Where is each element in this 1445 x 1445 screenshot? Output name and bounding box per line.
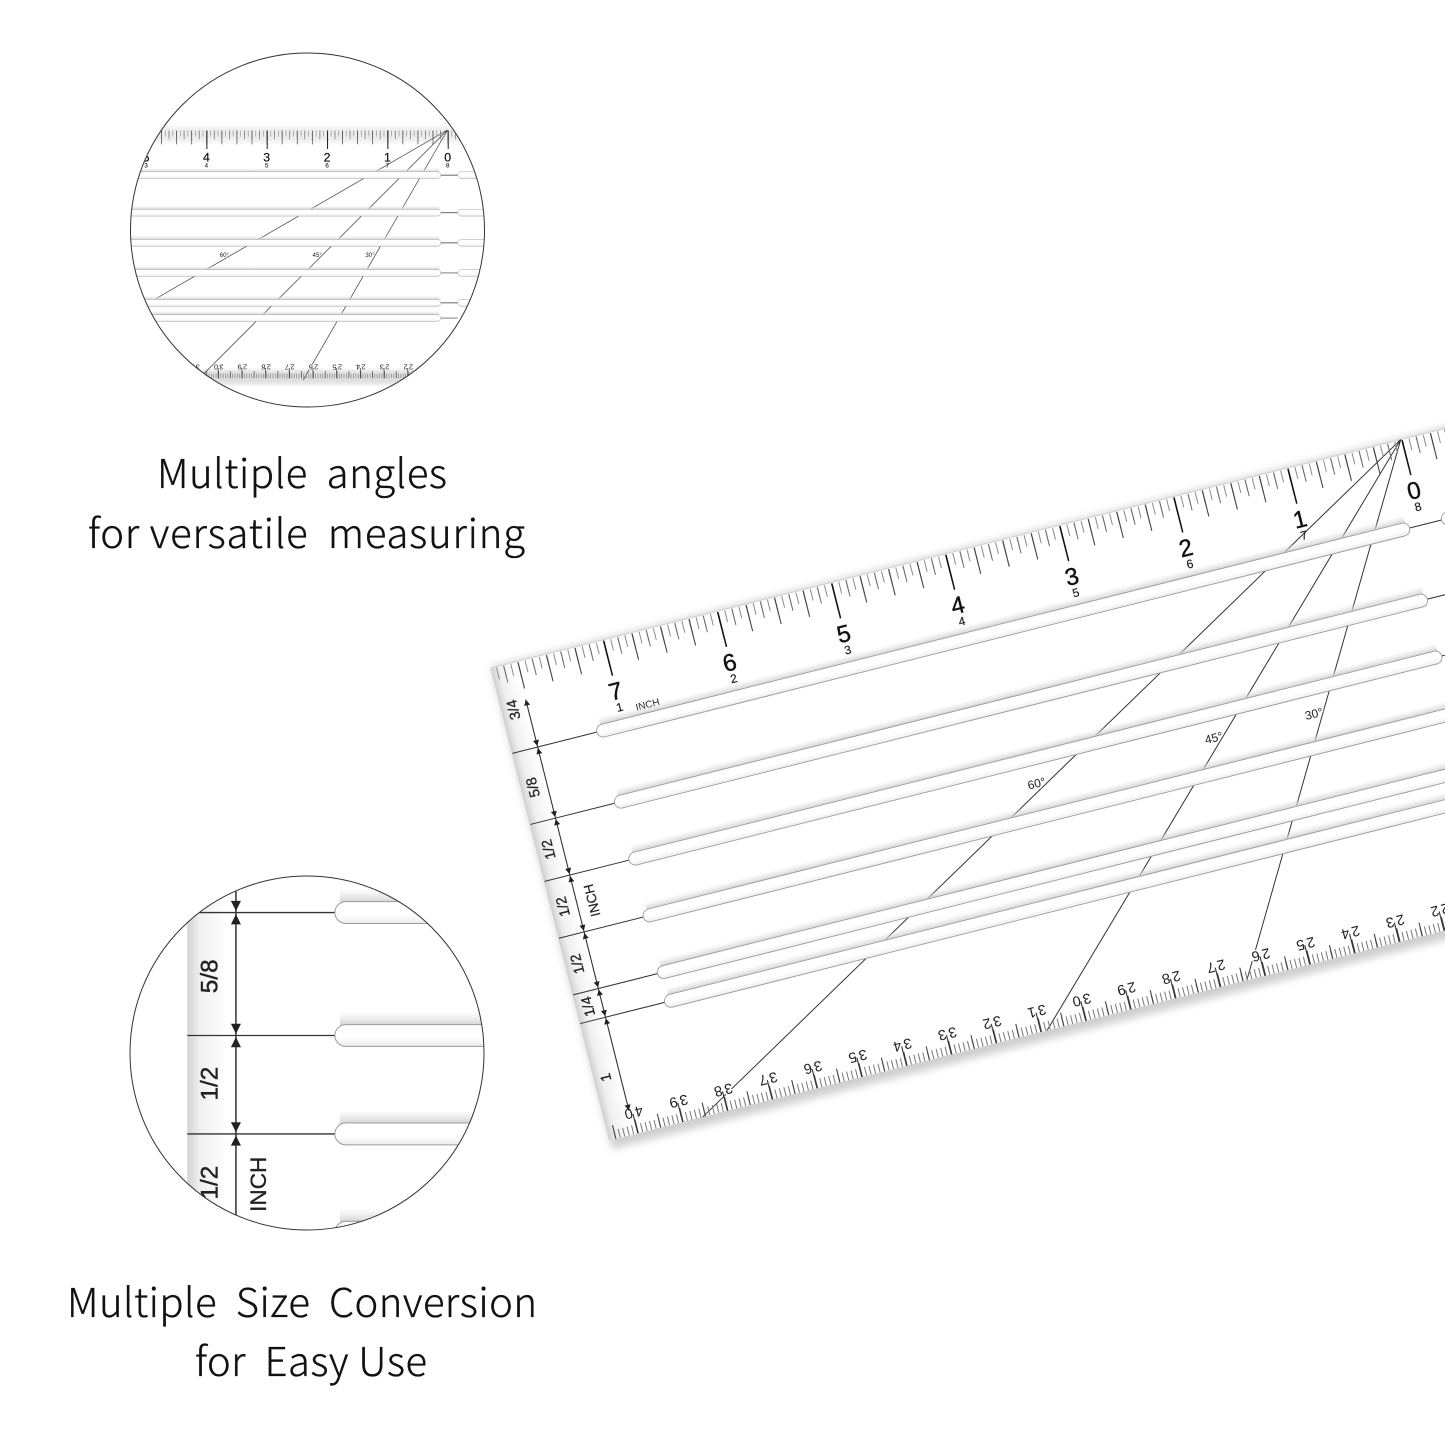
caption line 1: Multiple Size Conversion <box>67 1271 537 1329</box>
centimetre numbers: 35 <box>844 1045 869 1066</box>
inch numbers: 4 <box>948 591 968 621</box>
angle label 45: 45° <box>1203 729 1225 747</box>
detail centimetre numbers: 30 <box>213 362 223 371</box>
centimetre numbers: 26 <box>1247 944 1272 965</box>
detail slots <box>131 168 484 322</box>
detail inch numbers: 0 <box>444 150 451 164</box>
circle: size conversion detail <box>130 876 484 1230</box>
detail inch numbers: 5 <box>265 163 269 170</box>
angle lines <box>584 439 1445 1117</box>
inch numbers: 3 <box>843 642 853 658</box>
detail angle labels: 30° <box>365 252 375 259</box>
side measurement labels: 1/2 <box>554 895 574 918</box>
detail arrows <box>231 891 241 1215</box>
top inch ticks <box>498 407 1445 685</box>
detail angle labels: 45° <box>313 252 322 259</box>
detail top shade <box>154 127 460 142</box>
centimetre numbers: 32 <box>978 1012 1003 1032</box>
detail connector lines <box>441 175 458 318</box>
centimetre numbers: 36 <box>799 1057 824 1077</box>
detail labels: 1/2 <box>196 1166 223 1199</box>
detail division lines <box>187 912 334 1135</box>
left edge band <box>491 662 633 1140</box>
detail inch numbers: 5 <box>143 150 150 164</box>
detail centimetre numbers: 24 <box>355 362 366 371</box>
detail centimetre numbers: 26 <box>307 362 318 371</box>
detail inch numbers: 2 <box>324 150 331 164</box>
detail inch numbers: 3 <box>144 163 148 170</box>
detail inch numbers: 4 <box>203 150 210 164</box>
inch numbers: 4 <box>957 614 967 629</box>
centimetre numbers: 30 <box>1068 989 1092 1010</box>
side measurement labels: 1/2 <box>539 837 560 861</box>
detail angle lines <box>154 130 448 380</box>
caption: multiple angles <box>88 442 525 560</box>
detail centimetre numbers: 29 <box>236 362 247 371</box>
detail centimetre numbers: 27 <box>284 362 295 371</box>
detail inch numbers: 4 <box>205 163 209 170</box>
side measurement labels <box>504 691 643 1083</box>
centimetre numbers: 31 <box>1023 1000 1048 1021</box>
detail centimetre numbers: 28 <box>260 362 271 371</box>
circle outline <box>130 53 484 407</box>
centimetre numbers: 25 <box>1292 933 1316 954</box>
inch numbers: 0 <box>1404 477 1424 506</box>
inch numbers: 6 <box>720 648 740 678</box>
detail centimetre numbers <box>194 364 413 370</box>
division lines <box>512 520 1445 1024</box>
angle label 60: 60° <box>1026 775 1047 793</box>
detail inch numbers <box>144 152 451 168</box>
centimetre numbers: 28 <box>1158 967 1182 987</box>
side measurement labels: 1 <box>598 1071 615 1083</box>
circle background <box>130 876 484 1230</box>
detail centimetre numbers: 25 <box>331 362 342 371</box>
centimetre numbers: 27 <box>1202 955 1227 976</box>
centimetre numbers: 23 <box>1382 910 1406 931</box>
detail inch numbers: 3 <box>263 150 270 164</box>
ruler shadow <box>491 399 1445 1149</box>
side measurement labels: 3/4 <box>504 698 525 721</box>
inch numbers: 2 <box>729 671 739 686</box>
centimetre numbers: 39 <box>665 1090 689 1111</box>
bottom centimetre ticks <box>613 863 1445 1135</box>
centimetre numbers: 37 <box>755 1068 779 1089</box>
slots <box>593 472 1445 1009</box>
inch numbers: 5 <box>834 620 854 649</box>
inch numbers: 6 <box>1185 556 1195 572</box>
circle: multiple angles detail <box>130 52 485 408</box>
inch numbers: 2 <box>1176 534 1196 563</box>
detail angle labels: 60° <box>220 252 230 259</box>
circle background <box>130 53 484 407</box>
detail slots <box>334 892 484 1228</box>
centimetre numbers: 33 <box>934 1023 958 1043</box>
centimetre numbers: 24 <box>1337 922 1361 942</box>
caption line 1: Multiple angles <box>157 442 447 500</box>
detail bottom shade <box>200 368 416 386</box>
ruler body <box>491 400 1445 1140</box>
side measurement labels: 1/2 <box>568 952 588 975</box>
inch numbers <box>606 477 1426 716</box>
centimetre numbers: 29 <box>1113 978 1137 999</box>
caption line 2: for versatile measuring <box>88 502 525 560</box>
caption line 2: for Easy Use <box>195 1330 427 1388</box>
angle label 30: 30° <box>1303 705 1325 723</box>
main ruler <box>491 399 1445 1149</box>
top INCH label: INCH <box>635 697 661 714</box>
detail labels: 1/2 <box>196 1067 223 1101</box>
centimetre numbers: 34 <box>889 1034 913 1055</box>
detail inch numbers: 7 <box>386 163 390 170</box>
zoomed scale view <box>187 891 484 1228</box>
side measurement labels: 1/4 <box>579 995 599 1018</box>
centimetre numbers <box>620 899 1445 1122</box>
detail centimetre numbers: 22 <box>402 362 413 371</box>
ruler edge lines <box>491 400 1445 1140</box>
dimension arrows <box>523 699 632 1111</box>
detail labels <box>200 960 266 1210</box>
detail angle labels <box>220 252 376 258</box>
inch numbers: 5 <box>1071 585 1081 600</box>
detail inch numbers: 6 <box>325 163 329 170</box>
inch numbers: 3 <box>1062 563 1082 592</box>
inch numbers: 1 <box>615 700 625 715</box>
detail centimetre numbers: 31 <box>189 362 200 371</box>
inch numbers: 1 <box>1290 505 1310 535</box>
inch numbers: 7 <box>606 677 626 707</box>
detail labels: 5/8 <box>196 959 223 993</box>
detail left band <box>187 904 214 1202</box>
detail inch numbers: 8 <box>446 163 450 170</box>
centimetre numbers: 38 <box>710 1079 734 1100</box>
detail inch numbers: 1 <box>384 150 391 164</box>
circle outline <box>130 876 484 1230</box>
zoomed ruler view <box>0 127 531 384</box>
detail centimetre numbers: 23 <box>379 362 389 371</box>
side measurement labels: INCH <box>581 883 603 918</box>
detail labels: INCH <box>246 1157 271 1212</box>
inch numbers: 8 <box>1413 499 1423 514</box>
caption: size conversion <box>67 1271 537 1388</box>
centimetre numbers: 40 <box>620 1102 645 1122</box>
side measurement labels: 5/8 <box>524 775 544 799</box>
inch numbers: 7 <box>1299 528 1309 543</box>
detail ticks <box>158 130 456 378</box>
